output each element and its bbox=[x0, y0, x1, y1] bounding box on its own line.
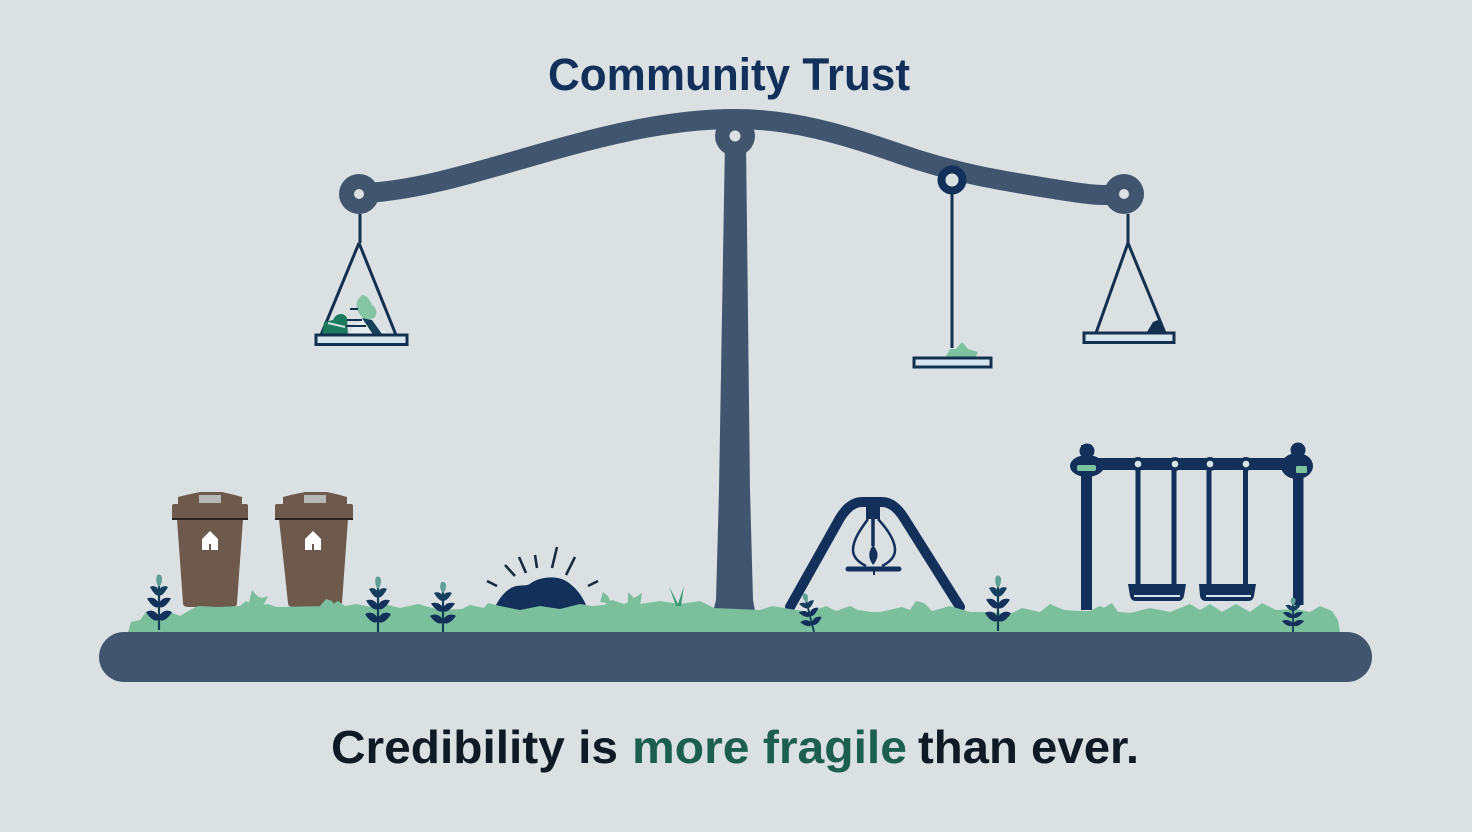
crossbar bbox=[1085, 458, 1300, 470]
posts bbox=[1081, 445, 1092, 610]
swing chains bbox=[1138, 470, 1246, 585]
left pivot bbox=[339, 174, 379, 214]
fern under a-frame bbox=[794, 591, 825, 635]
fern right of a-frame bbox=[985, 576, 1011, 631]
tagline: more fragile bbox=[632, 721, 907, 773]
grass strip bbox=[128, 600, 1340, 632]
swing seats bbox=[1128, 584, 1186, 601]
scale beam bbox=[365, 119, 1124, 195]
house icon bbox=[305, 531, 321, 550]
tufts bbox=[249, 590, 1118, 612]
tagline bbox=[331, 721, 1139, 773]
fern left of mound bbox=[365, 577, 391, 632]
fern far left bbox=[146, 575, 172, 630]
balance scale bbox=[316, 116, 1174, 616]
right pivot bbox=[1104, 174, 1144, 214]
right pan with contents bbox=[1084, 214, 1174, 342]
mound with rays bbox=[487, 547, 598, 614]
fern near mound bbox=[430, 582, 456, 632]
two-seat swing set bbox=[1070, 442, 1313, 610]
central pivot bbox=[715, 116, 755, 156]
house icon bbox=[202, 531, 218, 550]
central pillar bbox=[712, 140, 756, 616]
middle pivot and hanging pan bbox=[914, 170, 991, 367]
fern at right swing post bbox=[1282, 598, 1304, 632]
trash bin left bbox=[172, 492, 248, 607]
swing joints bbox=[1131, 457, 1253, 471]
green sprout bbox=[669, 586, 684, 606]
ground base bar bbox=[99, 632, 1372, 682]
tagline: than ever. bbox=[918, 721, 1139, 773]
trash bin right bbox=[275, 492, 353, 607]
left pan with contents bbox=[316, 214, 407, 344]
a-frame swing bbox=[790, 502, 960, 607]
title: Community Trust bbox=[548, 49, 910, 100]
tagline: Credibility is bbox=[331, 721, 618, 773]
